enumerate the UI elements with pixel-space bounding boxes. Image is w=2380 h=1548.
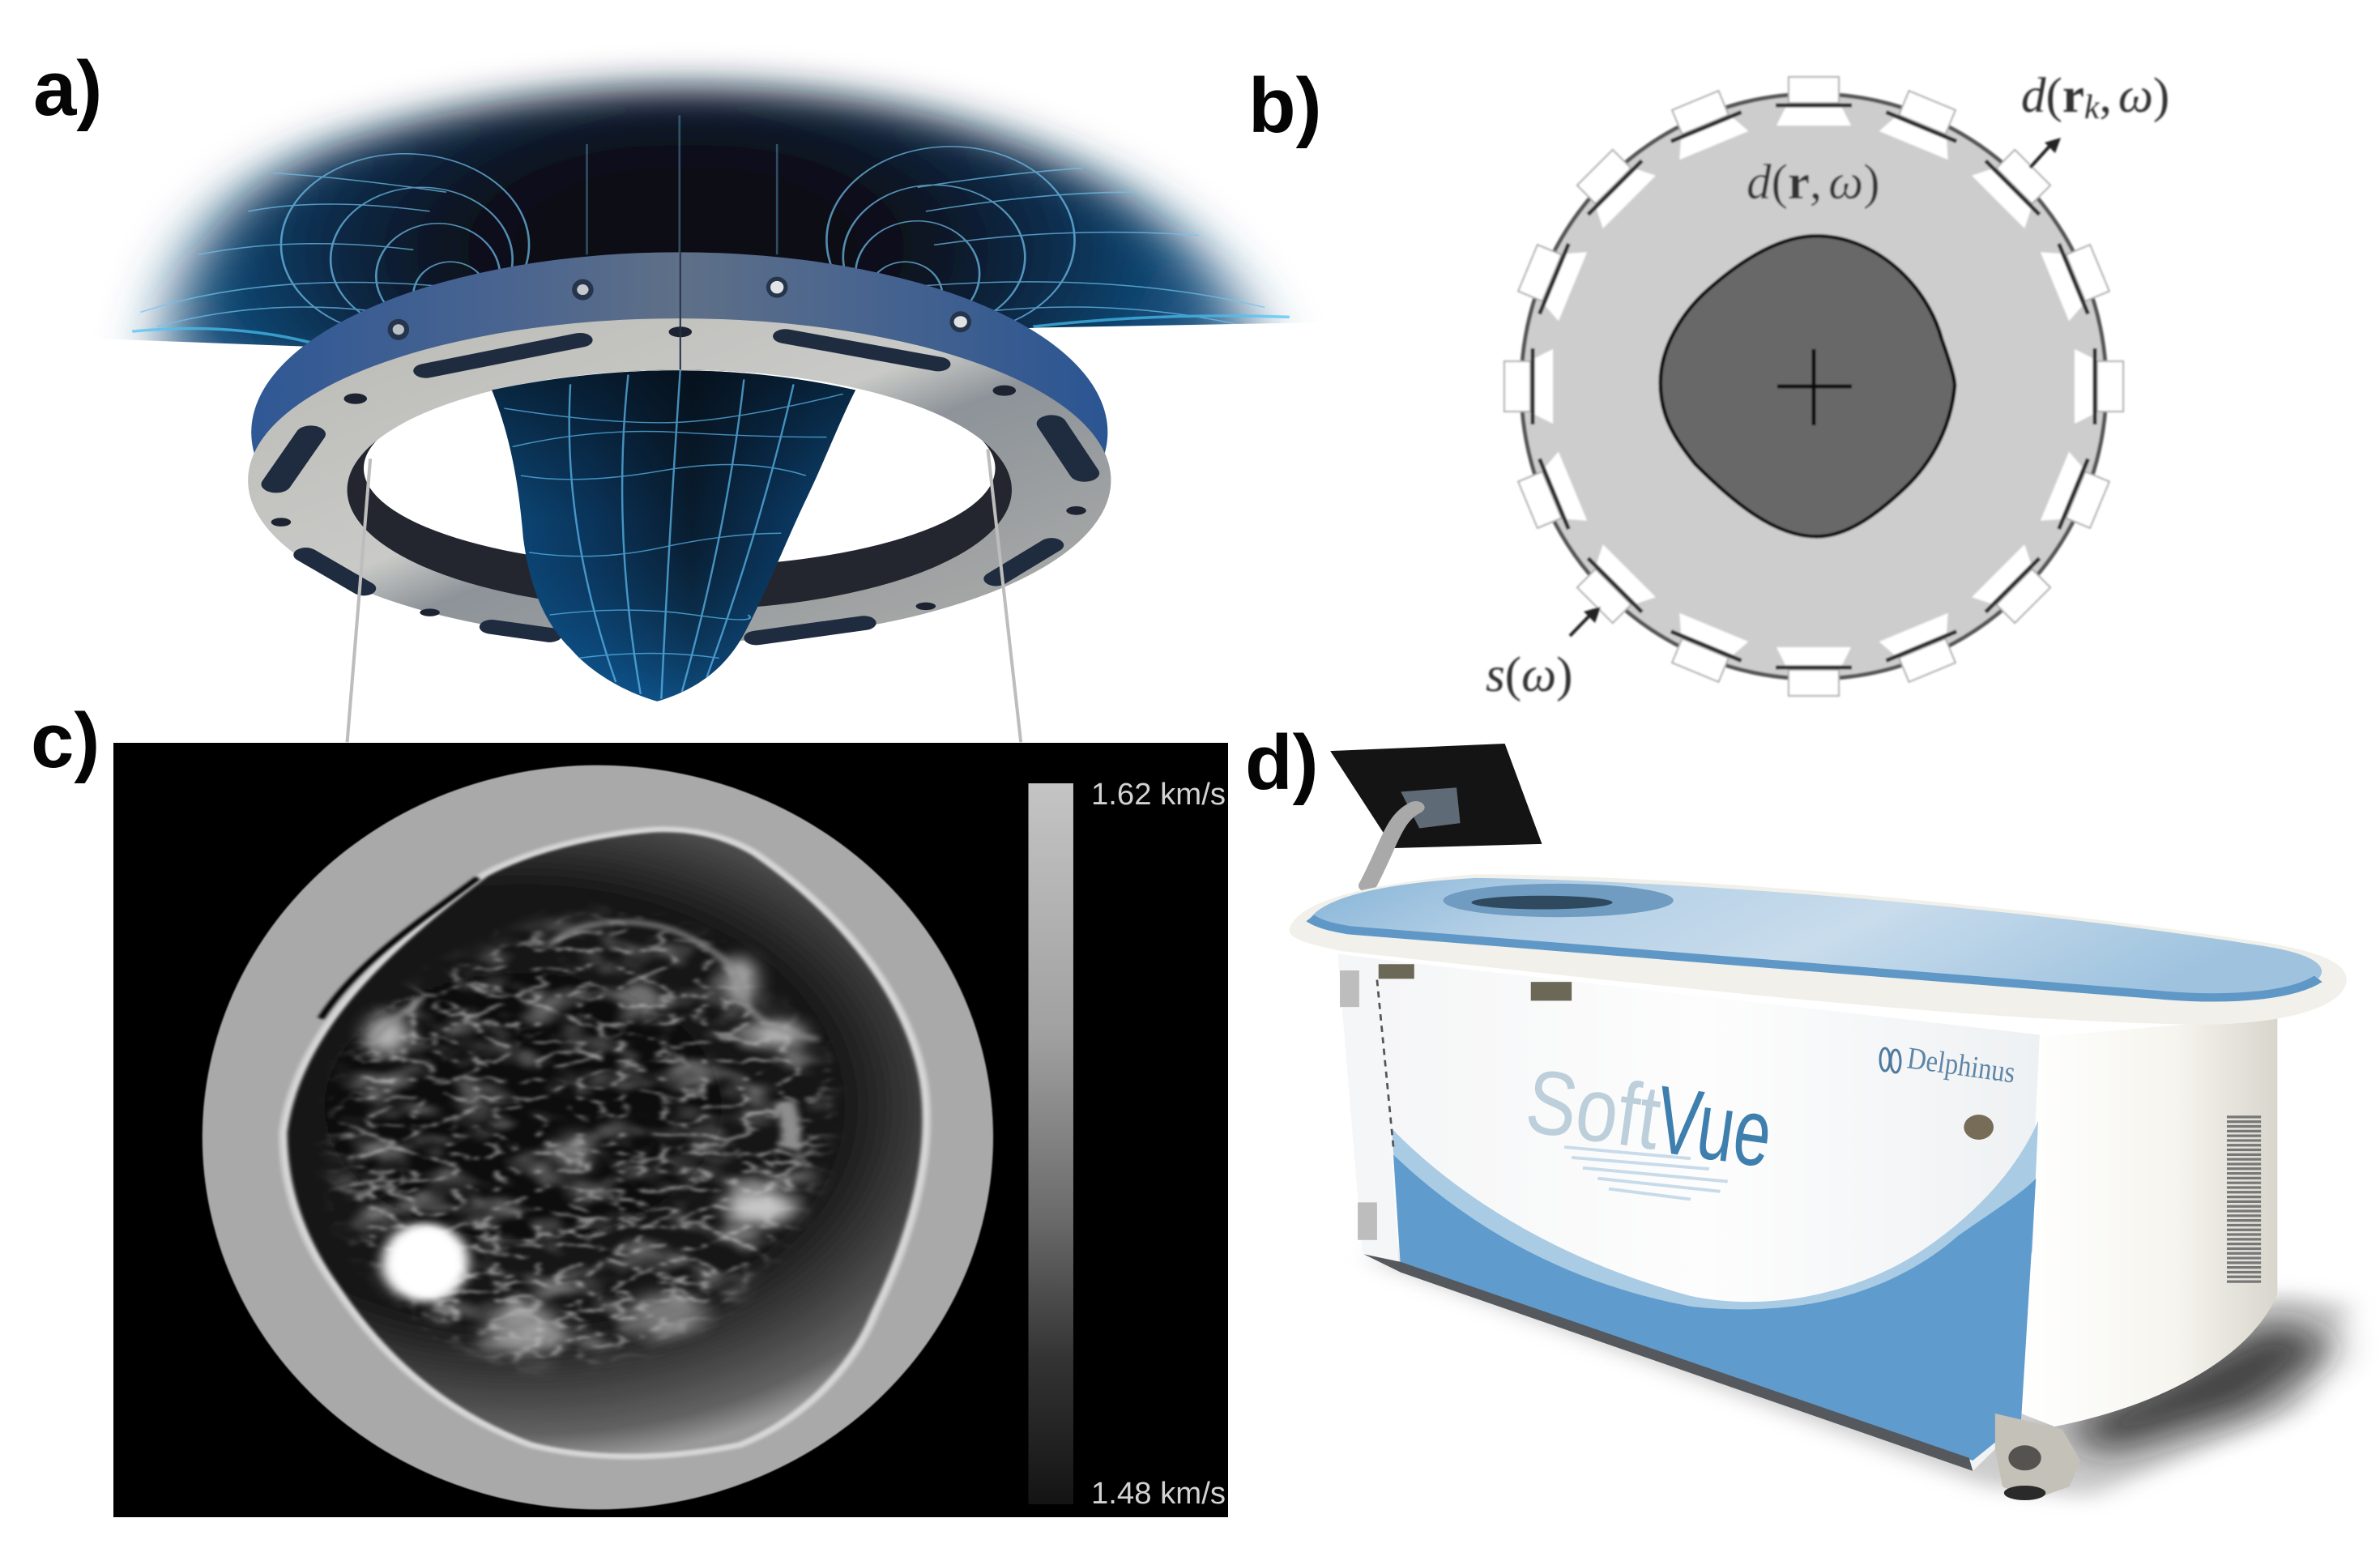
tissue margin strands <box>373 922 819 1148</box>
right curved side <box>2021 1017 2277 1426</box>
base plinth <box>1363 1254 1973 1471</box>
label d(r_k,ω): k <box>2084 89 2101 126</box>
panel d: SoftVue scanner <box>1290 744 2352 1500</box>
light blue swoosh <box>1392 1121 2038 1408</box>
label b: b) <box>1248 62 1322 149</box>
label a: a) <box>33 45 102 132</box>
aperture inner <box>1471 896 1613 910</box>
ring inner wall <box>345 369 1014 611</box>
breast aperture <box>1444 884 1674 917</box>
label c: c) <box>31 697 100 784</box>
floor shadow <box>1363 1252 2352 1497</box>
ring face <box>248 318 1111 642</box>
label d(r_k,ω): d(r <box>2021 69 2084 123</box>
connector port <box>1964 1115 1994 1140</box>
logo: Delphinus: Delphinus <box>1905 1041 2017 1090</box>
white rim <box>1290 874 2347 1025</box>
dark skin edge <box>321 878 478 1018</box>
wavefront cone <box>492 370 855 702</box>
label d: d) <box>1245 719 1319 806</box>
label s(ω): s(ω) <box>1486 648 1572 702</box>
label d(r_k,ω): ω) <box>2118 69 2169 123</box>
sensor slots <box>276 336 1085 638</box>
vent grille <box>2225 1115 2263 1283</box>
bright tumour <box>382 1223 469 1302</box>
latches <box>1379 964 1572 1000</box>
front panel <box>1377 959 2040 1471</box>
array disc <box>1521 94 2106 679</box>
panel c: speed of sound tomogram <box>113 743 1228 1517</box>
side grilles <box>1340 970 1377 1240</box>
scale label low: 1.48 km/s <box>1091 1477 1226 1511</box>
logo: Vue: Vue <box>1649 1066 1778 1188</box>
caster wheel <box>1995 1414 2080 1500</box>
monitor <box>1330 744 1542 886</box>
sixteen transducers <box>1504 77 2123 696</box>
panel a: ring transducer with wavefront funnel <box>132 87 1290 742</box>
panel b: circular transducer array diagram <box>1486 69 2169 702</box>
left end panel <box>1337 953 1399 1270</box>
skin highlight <box>284 829 927 1456</box>
label d(r_k,ω): , <box>2100 69 2112 123</box>
logo: Soft: Soft <box>1521 1050 1666 1169</box>
arrow to source <box>1570 607 1601 636</box>
panel seam <box>1377 980 1393 1147</box>
black image background <box>113 743 1228 1517</box>
ring opening <box>364 370 996 567</box>
ring outer wall <box>251 252 1107 612</box>
scatterer region <box>1661 236 1955 536</box>
ring screws <box>271 252 1086 616</box>
secondary lesion <box>725 1191 797 1224</box>
funnel backdrop <box>132 87 1290 375</box>
centre cross <box>1777 349 1852 425</box>
breast tissue <box>284 829 927 1456</box>
fibroglandular texture <box>323 906 841 1375</box>
support rods <box>348 449 1021 742</box>
bright glandular patches <box>367 957 804 1354</box>
arrow to receiver <box>2030 138 2061 168</box>
dark blue swoosh <box>1393 1155 2036 1461</box>
label d(r,ω): d(r,ω) <box>1747 156 1880 210</box>
scale label high: 1.62 km/s <box>1091 778 1226 812</box>
ripple logo lines <box>1564 1147 1728 1199</box>
blue table top <box>1310 878 2322 997</box>
colour bar <box>1028 783 1073 1504</box>
table edge shading <box>1310 918 2318 997</box>
outer water ring <box>203 765 993 1509</box>
logo: Delphinus emblem <box>1880 1048 1900 1073</box>
